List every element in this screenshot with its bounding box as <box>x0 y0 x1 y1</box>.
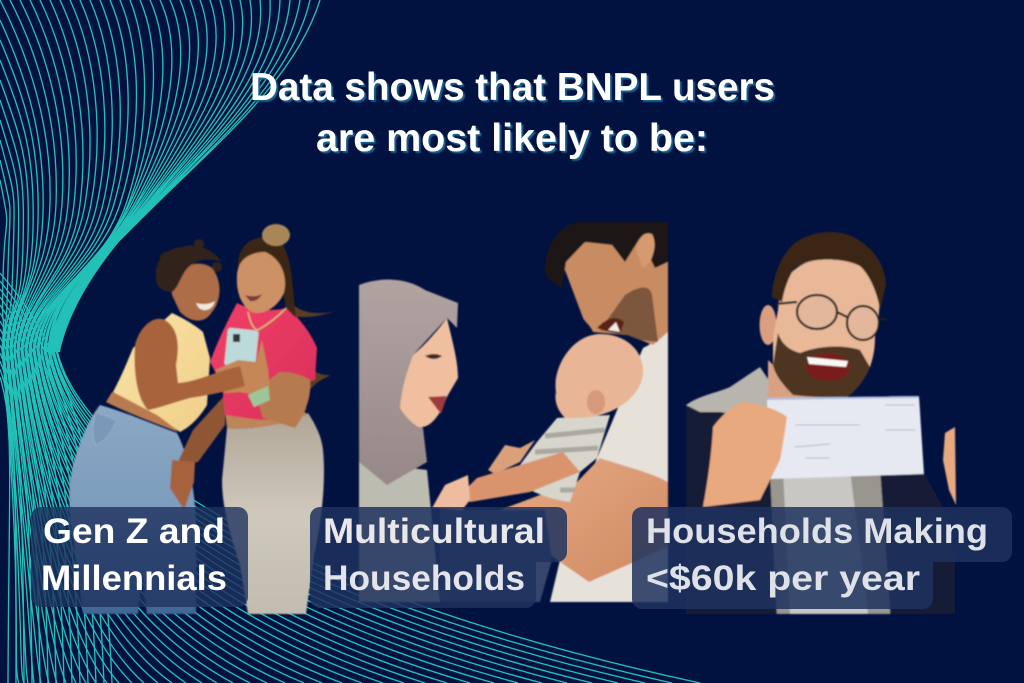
left woman yellow top <box>113 313 210 432</box>
wave: twisted line ribbon from top to bottom <box>0 0 700 683</box>
check <box>767 396 924 479</box>
caption: Households Making <$60k per year: Households Making <box>646 512 988 551</box>
watch <box>248 386 270 407</box>
phone camera <box>233 334 240 342</box>
hair strands <box>288 300 335 392</box>
right woman arm <box>258 372 310 428</box>
teeth <box>807 357 848 367</box>
jeans pocket <box>93 412 116 445</box>
right woman face <box>237 252 285 313</box>
caption: Multicultural Households: Households <box>323 559 525 598</box>
man's beard shadow <box>600 288 658 342</box>
baby's far hand <box>488 440 535 474</box>
caption: Gen Z and Millennials: Gen Z and <box>43 512 225 551</box>
left hand <box>703 402 787 507</box>
arm behind <box>176 395 225 466</box>
baby onesie <box>520 415 610 502</box>
mouth <box>806 353 850 381</box>
right woman belly <box>225 412 307 428</box>
glasses <box>775 295 887 340</box>
face <box>773 260 879 397</box>
jacket <box>686 405 955 614</box>
woman's hijab <box>359 280 458 485</box>
man's teeth <box>608 322 620 332</box>
man's forearm <box>500 458 668 582</box>
right woman bun <box>262 224 290 246</box>
neck <box>768 360 840 400</box>
phone <box>224 328 259 369</box>
hair <box>772 232 886 310</box>
shirt shadows <box>770 470 890 614</box>
necklace <box>248 308 286 330</box>
woman's striped shirt <box>359 462 440 602</box>
hoodie collar <box>686 367 772 420</box>
man's hair <box>545 222 668 288</box>
left woman arm <box>135 319 245 410</box>
left woman hair with buns <box>156 239 222 292</box>
right fist <box>943 427 956 505</box>
wave: crossing lines bottom left <box>0 273 112 683</box>
right woman pants <box>222 413 324 614</box>
baby ear <box>587 390 605 414</box>
caption: Gen Z and Millennials <box>31 507 248 607</box>
left woman smile <box>196 301 215 310</box>
left woman head and neck <box>172 264 220 321</box>
man's face <box>562 225 668 345</box>
onesie stripes <box>535 430 605 490</box>
title: Data shows that BNPL users <box>250 66 775 109</box>
hands holding phone <box>215 340 270 395</box>
right woman pink shirt <box>210 303 317 420</box>
beard <box>773 333 870 397</box>
woman's face <box>400 318 458 427</box>
photo: two young women with a phone <box>69 224 335 614</box>
photo: man holding a check <box>686 232 956 614</box>
man's mouth <box>597 318 624 334</box>
caption: Multicultural Households <box>310 507 567 608</box>
woman's eye <box>425 354 442 359</box>
left woman jeans <box>69 405 196 614</box>
man's t-shirt <box>550 330 668 602</box>
woman's hand <box>432 475 470 510</box>
right woman hair <box>238 237 296 318</box>
title <box>250 66 775 160</box>
dark lower area <box>440 510 552 602</box>
ear <box>760 305 776 345</box>
woman's mouth <box>428 396 447 414</box>
caption: Gen Z and Millennials: Millennials <box>41 559 227 598</box>
man's ear <box>636 233 655 268</box>
hand on hip <box>170 460 195 510</box>
grey shirt <box>770 470 890 614</box>
left woman belly skin <box>106 392 178 432</box>
caption: Households Making <$60k per year: <$60k per year <box>646 559 920 598</box>
check top edge <box>767 396 919 400</box>
title: are most likely to be: <box>316 117 708 160</box>
right woman mouth <box>245 294 262 301</box>
baby's arm <box>460 452 580 502</box>
caption: Multicultural Households: Multicultural <box>323 512 545 551</box>
check print <box>795 405 915 458</box>
baby head <box>555 334 643 418</box>
caption: Households Making <$60k per year <box>632 507 1012 609</box>
wave: solid band where the lines converge <box>46 170 190 352</box>
photo: family with baby <box>359 222 668 602</box>
